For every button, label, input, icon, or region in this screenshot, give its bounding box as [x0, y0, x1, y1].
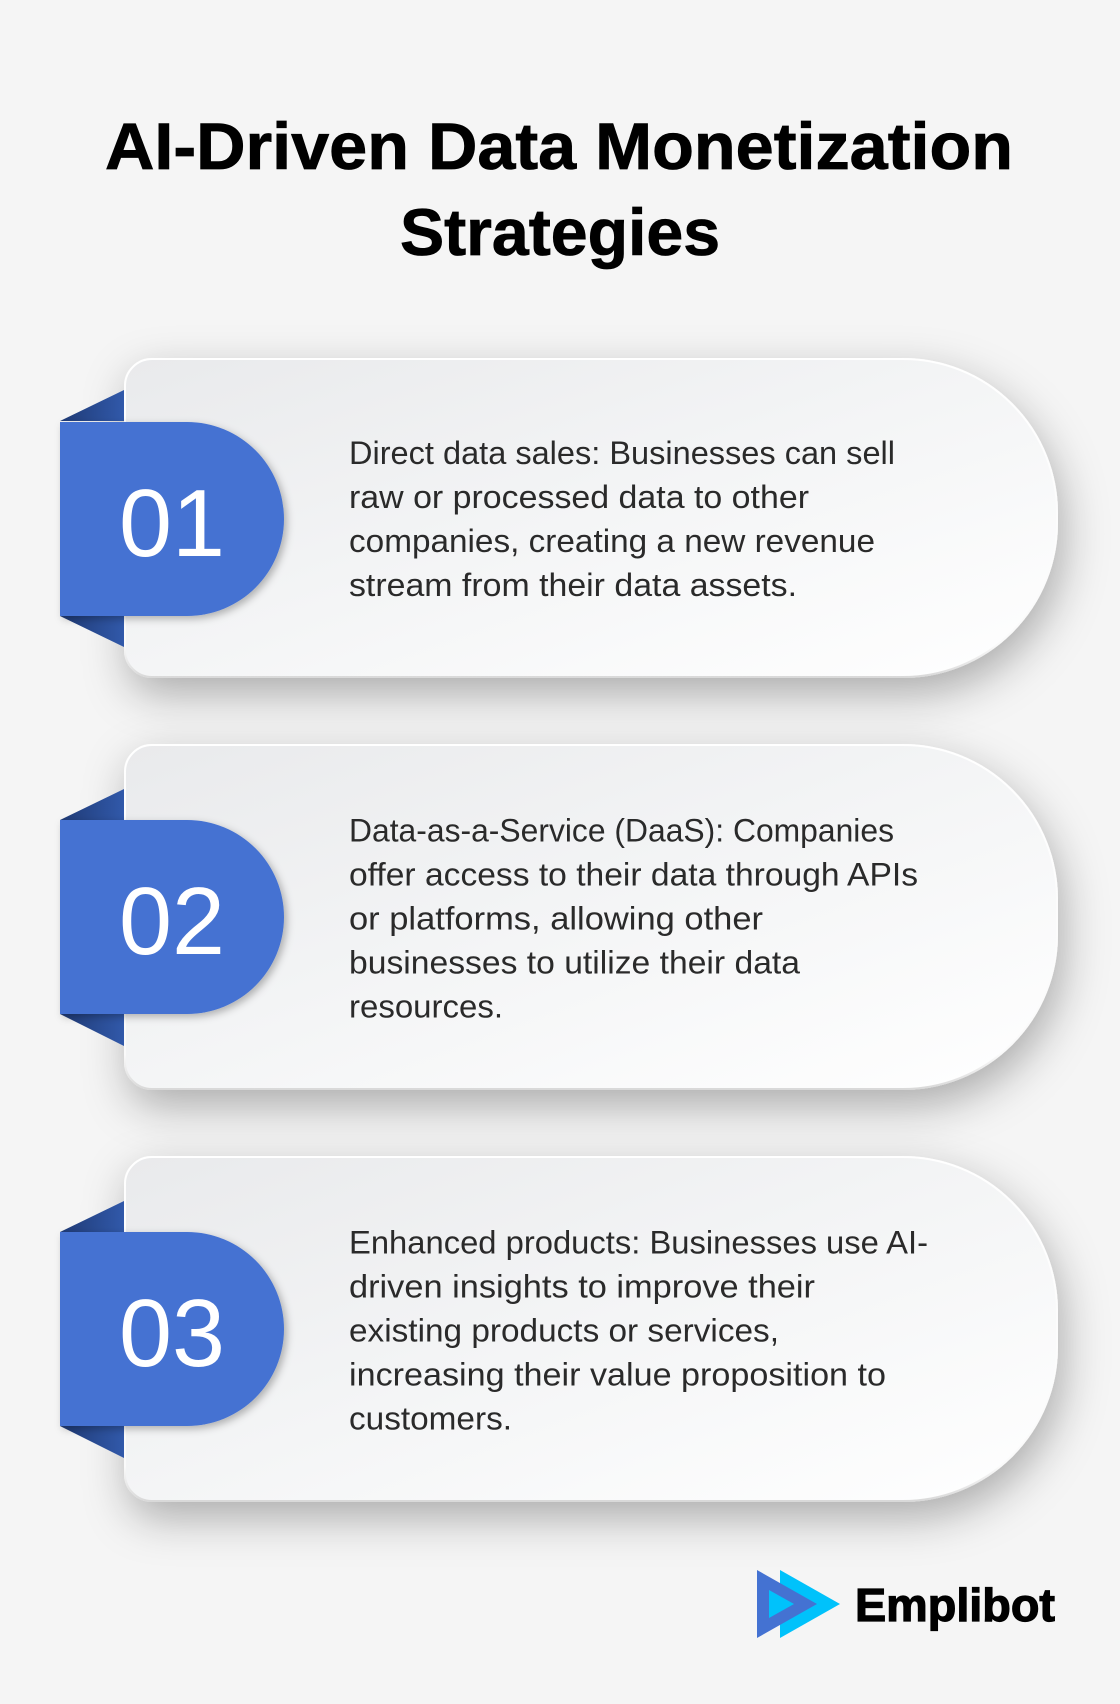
text block 2: Data-as-a-Service (DaaS): Companies	[349, 812, 894, 848]
text block 1: Direct data sales: Businesses can sell	[349, 435, 895, 471]
text block 3: driven insights to improve their	[349, 1268, 815, 1304]
text block 1: stream from their data assets.	[349, 567, 797, 603]
card 2 background	[125, 745, 1057, 1089]
ribbon fold bottom 2	[60, 1014, 124, 1046]
text block 1: raw or processed data to other	[349, 479, 809, 515]
ribbon fold bottom 1	[60, 616, 124, 647]
text block 2: resources.	[349, 988, 503, 1024]
text block 3: existing products or services,	[349, 1312, 779, 1348]
ribbon fold top 1	[60, 390, 124, 421]
ribbon fold bottom 3	[60, 1426, 124, 1458]
title: Strategies	[400, 195, 720, 269]
panel: step 2 data as a service	[60, 745, 1057, 1089]
text block 3: customers.	[349, 1400, 512, 1436]
text block 3: increasing their value proposition to	[349, 1356, 886, 1392]
card 3 background	[125, 1157, 1057, 1501]
icon: play triangles	[757, 1570, 840, 1638]
text block 1	[349, 435, 895, 603]
text block 2: or platforms, allowing other	[349, 900, 763, 936]
number badge 3	[60, 1232, 284, 1426]
number badge 2	[60, 820, 284, 1014]
title: AI-Driven Data Monetization	[105, 109, 1013, 183]
text block 3: Enhanced products: Businesses use AI-	[349, 1224, 928, 1260]
ribbon fold top 2	[60, 789, 124, 820]
number badge 1: 01	[119, 470, 225, 577]
number badge 2: 02	[119, 868, 225, 975]
panel: step 1 direct data sales	[60, 359, 1057, 677]
number badge 1	[60, 422, 284, 616]
text block 2: businesses to utilize their data	[349, 944, 801, 980]
text block 3	[349, 1224, 928, 1436]
logo: Emplibot	[757, 1570, 1055, 1638]
number badge 3: 03	[119, 1280, 225, 1387]
text block 2	[349, 812, 918, 1024]
ribbon fold top 3	[60, 1201, 124, 1232]
logo wordmark: Emplibot	[855, 1579, 1055, 1631]
text block 1: companies, creating a new revenue	[349, 523, 875, 559]
text block 2: offer access to their data through APIs	[349, 856, 918, 892]
title	[105, 109, 1013, 269]
card 1 background	[125, 359, 1057, 677]
panel: step 3 enhanced products	[60, 1157, 1057, 1501]
